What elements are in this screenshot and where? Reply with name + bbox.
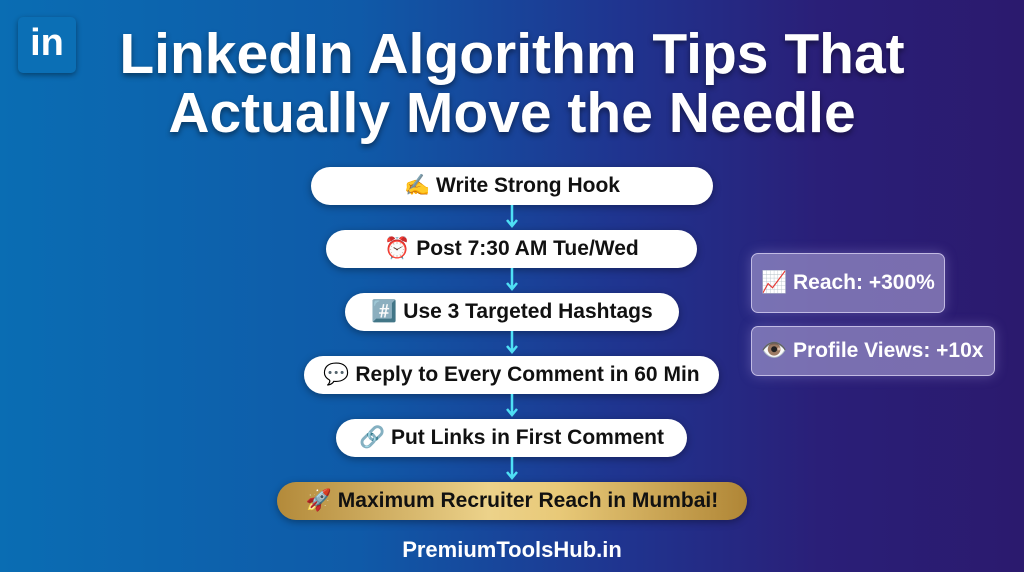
arrow 4	[506, 394, 518, 417]
pill: result gold	[277, 482, 747, 520]
title: Actually Move the Needle	[168, 81, 856, 145]
pill: reply	[304, 356, 719, 394]
footer: PremiumToolsHub.in	[402, 537, 622, 562]
pill: write strong hook	[311, 167, 713, 205]
pill: post time	[326, 230, 697, 268]
pill: post time: ⏰ Post 7:30 AM Tue/Wed	[384, 237, 639, 260]
pill: links	[336, 419, 687, 457]
arrow 1	[506, 205, 518, 228]
stat: reach	[751, 253, 945, 313]
pill: result gold: 🚀 Maximum Recruiter Reach in Mumbai!	[306, 489, 718, 512]
pill: write strong hook: ✍️ Write Strong Hook	[404, 174, 620, 197]
stat: reach: 📈 Reach: +300%	[761, 271, 935, 294]
icon: linkedin logo	[18, 17, 76, 73]
stat: profile views: 👁️ Profile Views: +10x	[761, 339, 983, 362]
pill: hashtags	[345, 293, 679, 331]
arrow 3	[506, 331, 518, 354]
title	[119, 22, 906, 150]
pill: links: 🔗 Put Links in First Comment	[359, 426, 664, 449]
stat: profile views	[751, 326, 995, 376]
arrow 5	[506, 457, 518, 480]
title: LinkedIn Algorithm Tips That	[119, 22, 905, 86]
arrow 2	[506, 268, 518, 291]
icon: linkedin logo: in	[30, 22, 64, 64]
pill: reply: 💬 Reply to Every Comment in 60 Min	[323, 363, 700, 386]
pill: hashtags: #️⃣ Use 3 Targeted Hashtags	[371, 300, 653, 323]
